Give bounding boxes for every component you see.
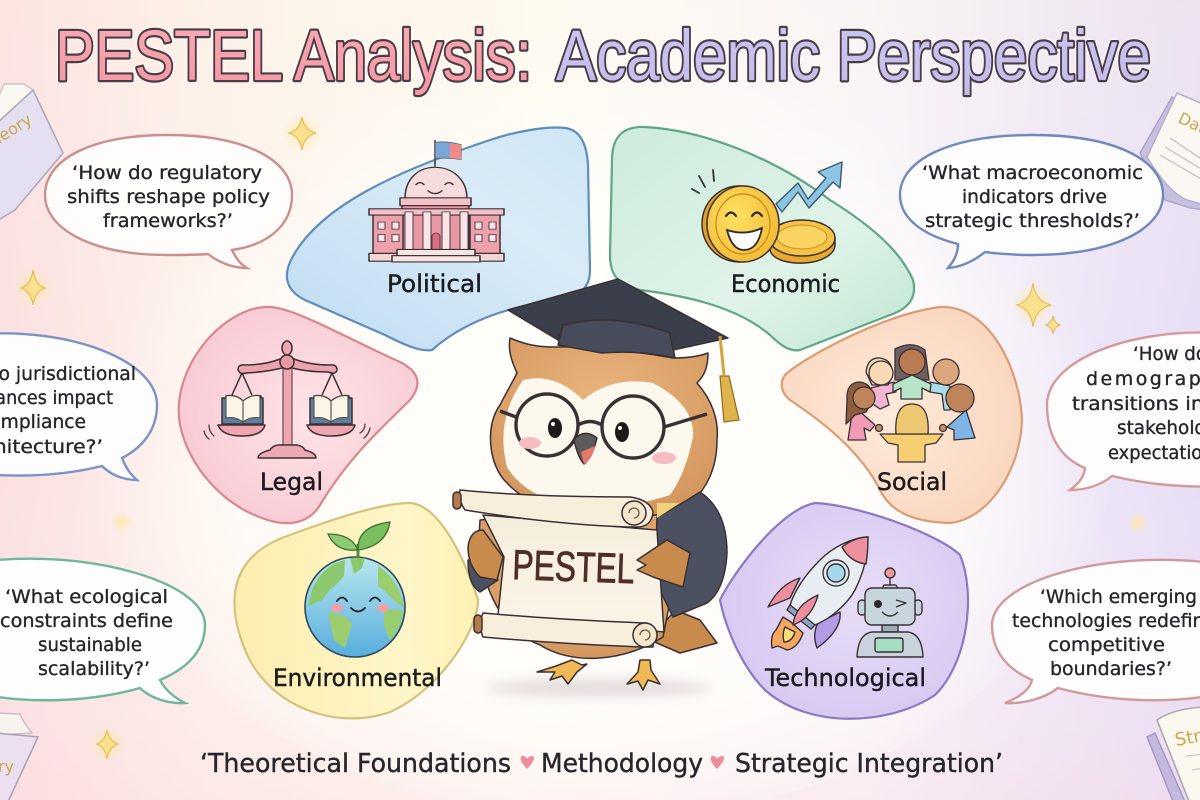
panel: environmental	[234, 503, 478, 718]
speech bubble: macroeconomic: indicators drive	[962, 186, 1107, 208]
speech bubble: macroeconomic: strategic thresholds?’	[925, 210, 1140, 232]
footer tagline: Methodology	[541, 749, 703, 779]
speech bubble: technologies: competitive	[1048, 634, 1165, 656]
feet	[537, 660, 587, 684]
icon: people in a circle	[846, 345, 975, 462]
label: Economic: Economic	[731, 270, 840, 298]
speech bubble: macroeconomic	[900, 135, 1163, 268]
label: Social: Social	[877, 468, 947, 496]
book: Theory	[0, 84, 63, 220]
speech bubble: regulatory: shifts reshape policy	[67, 186, 270, 208]
face	[503, 378, 693, 507]
title	[55, 17, 1151, 96]
eyes	[548, 418, 562, 438]
icon: capitol building	[369, 140, 504, 262]
speech bubble: regulatory	[45, 135, 292, 268]
icon: smiling coin with arrow	[692, 162, 842, 263]
speech bubble: ecological: scalability?’	[38, 658, 150, 680]
speech bubble: demographic	[1047, 332, 1200, 490]
owl mascot	[453, 279, 739, 697]
label: Technological: Technological	[764, 664, 926, 692]
head	[490, 338, 717, 519]
panel: economic	[610, 127, 914, 350]
panel: political	[287, 128, 590, 350]
speech bubble: technologies	[992, 560, 1200, 703]
label: Political: Political	[387, 270, 482, 298]
cheeks	[519, 437, 541, 449]
speech bubble: ecological: sustainable	[38, 634, 142, 656]
right hand	[637, 540, 690, 587]
book: Strategy corner	[1147, 707, 1200, 800]
footer tagline: Strategic Integration’	[735, 749, 1003, 779]
scroll label: PESTEL	[512, 541, 635, 592]
speech bubble: technologies: boundaries?’	[1050, 658, 1172, 680]
speech bubble: macroeconomic: ‘What macroeconomic	[922, 162, 1143, 184]
speech bubble: regulatory: ‘How do regulatory	[72, 162, 262, 184]
speech bubble: ecological: constraints define	[0, 610, 173, 632]
speech bubble: ecological: ‘What ecological	[5, 586, 168, 608]
panel: technological	[720, 503, 968, 719]
icon: rocket and robot	[768, 537, 923, 657]
title: PESTEL Analysis:	[55, 17, 532, 96]
graduation cap	[508, 279, 739, 422]
body	[479, 500, 690, 658]
icon: scales with books	[204, 341, 370, 458]
left hand	[468, 530, 503, 580]
scroll	[453, 490, 664, 647]
speech bubble: ecological	[0, 559, 205, 703]
footer tagline: ‘Theoretical Foundations	[200, 749, 511, 779]
panel: social	[782, 307, 1022, 523]
speech bubble: regulatory: frameworks?’	[103, 210, 233, 232]
label: Environmental: Environmental	[273, 664, 442, 692]
beak	[574, 433, 597, 464]
panel: legal	[179, 307, 417, 523]
book: Theory corner	[0, 713, 38, 800]
book: Data	[1140, 93, 1200, 210]
speech bubble: technologies: ‘Which emerging	[1040, 586, 1197, 608]
tail	[650, 610, 717, 653]
footer tagline	[200, 749, 1003, 779]
sparkles	[13, 113, 1149, 762]
speech bubble: jurisdictional	[0, 333, 157, 480]
gown sleeve	[655, 492, 727, 617]
icon: smiling earth with sprout	[305, 522, 405, 657]
label: Legal: Legal	[260, 468, 323, 496]
glasses	[500, 394, 707, 458]
